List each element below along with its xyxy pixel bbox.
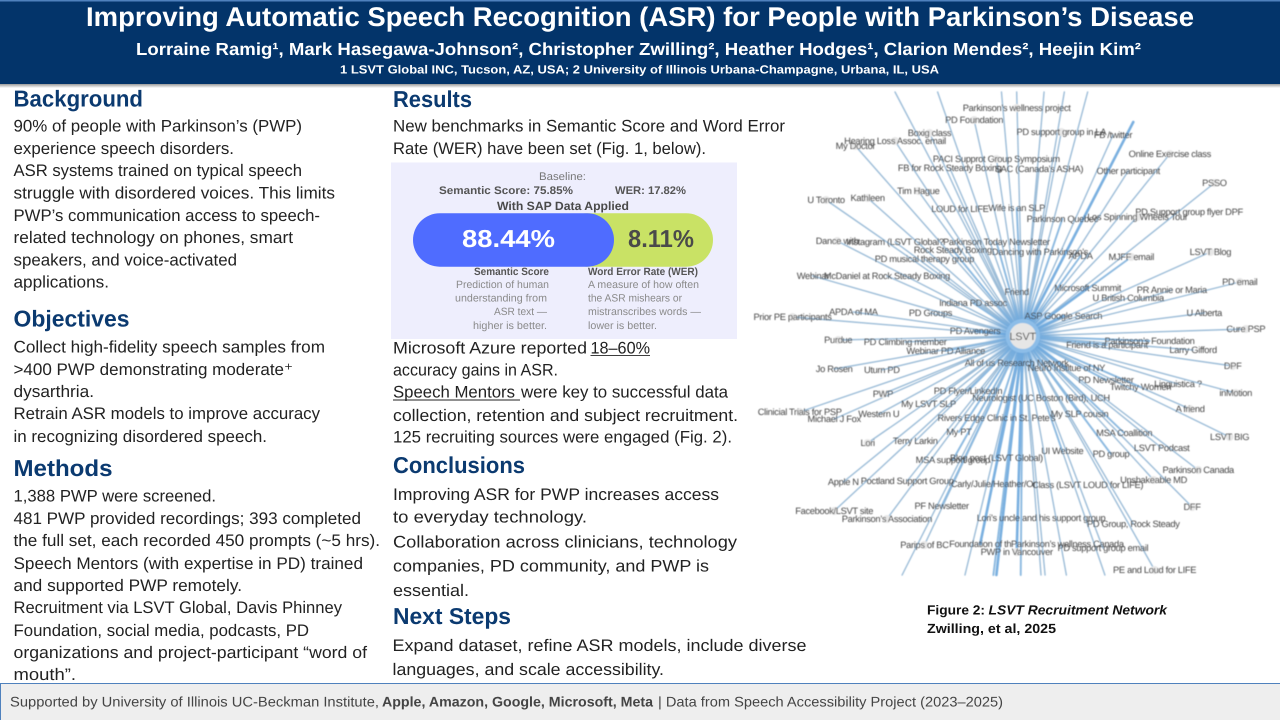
conclusions text: Collaboration across clinicians, technology [393, 533, 738, 552]
title: Improving Automatic Speech Recognition (ASR) for People with Parkinson’s Disease [86, 2, 1194, 32]
semantic score definition [455, 266, 549, 332]
network labels top: ASP Google Search [1024, 311, 1102, 321]
network labels bottom: A friend [1176, 404, 1205, 414]
heading: conclusions: Conclusions [393, 452, 525, 478]
panel: methods [14, 455, 380, 684]
network labels bottom: PD Climbing member [864, 337, 947, 347]
network labels bottom: LSVT Podcast [1134, 443, 1190, 453]
background text: PWP’s communication access to speech- [14, 206, 320, 225]
network labels bottom: Poctland Support Group [861, 476, 954, 486]
semantic score definition: ASR text — [494, 306, 547, 318]
network labels top: U Alberta [1187, 308, 1223, 318]
network labels top: Parkinson Today Newsletter [943, 237, 1050, 247]
network labels bottom: Western U [858, 409, 899, 419]
footer text [10, 694, 1003, 710]
network labels top: MJFF email [1109, 252, 1154, 262]
methods text: Recruitment via LSVT Global, Davis Phinney [14, 598, 343, 617]
objectives text: Collect high-fidelity speech samples from [14, 337, 325, 356]
network labels top: U British Columbia [1093, 293, 1165, 303]
results findings: 125 recruiting sources were engaged (Fig. 2). [393, 428, 732, 447]
conclusions text: Improving ASR for PWP increases access [393, 485, 719, 504]
network labels top: Rock Steady Boxing [914, 245, 992, 255]
next steps text [392, 636, 806, 679]
background text: struggle with disordered voices. This limits [14, 184, 335, 203]
word error rate definition: the ASR mishears or [588, 293, 682, 305]
conclusions text [393, 485, 738, 600]
network labels top: Friend [1004, 287, 1029, 297]
network labels bottom: DFF [1184, 502, 1201, 512]
footer text: | Data from Speech Accessibility Project (2023–2025) [658, 694, 1003, 710]
methods text: Speech Mentors (with expertise in PD) trained [14, 554, 363, 573]
figure 2 caption [927, 602, 1168, 636]
semantic score pill [413, 213, 614, 267]
network labels top: Dance with [816, 236, 859, 246]
network labels bottom: PF Newsletter [915, 501, 969, 511]
baseline scores: Semantic Score: 75.85% [439, 185, 573, 197]
network labels bottom: Uturn PD [864, 365, 900, 375]
methods text: Foundation, social media, podcasts, PD [14, 621, 309, 640]
network labels bottom: Unshakeable MD [1120, 475, 1188, 485]
network labels bottom: inMotion [1219, 388, 1252, 398]
header banner [0, 0, 1280, 88]
background text: related technology on phones, smart [14, 228, 293, 247]
network labels bottom: PD Newsletter [1078, 375, 1134, 385]
network labels top: PD Groups [909, 308, 953, 318]
network labels top: Dancing with Parkinson’s [992, 247, 1089, 257]
network labels bottom: Parips of BC [900, 540, 949, 550]
authors: Lorraine Ramig¹, Mark Hasegawa-Johnson², Christopher Zwilling², Heather Hodges¹, Clarion Mendes², Heejin Kim² [136, 39, 1141, 59]
network labels bottom: PE and Loud for LIFE [1113, 565, 1196, 575]
network labels bottom: Rivers Edge Clinic in St. Pete’s [937, 413, 1056, 423]
network labels top: PD Avengers [950, 326, 1001, 336]
network labels bottom: Lori’s uncle and his support group [977, 513, 1106, 523]
panel: conclusions [393, 452, 738, 600]
network labels bottom: Carly/Julie/Heather/Or [951, 479, 1036, 489]
network labels top: U Toronto [807, 195, 845, 205]
network labels top: Wife is an SLP [988, 203, 1045, 213]
network nodes [789, 104, 1250, 574]
network labels bottom: Apple N [828, 477, 859, 487]
network labels top: Boxig class [908, 128, 952, 138]
network labels bottom: MSA Coallition [1096, 428, 1152, 438]
baseline scores: WER: 17.82% [615, 185, 686, 197]
network labels top: Instagram (LSVT Global? [846, 237, 944, 247]
network labels bottom: PWP [873, 389, 893, 399]
word error rate definition: A measure of how often [588, 279, 699, 291]
network labels bottom: Jo Rosen [816, 364, 853, 374]
panel: objectives [14, 306, 325, 446]
footer bar [0, 684, 1280, 720]
network labels top: Other participant [1097, 166, 1161, 176]
objectives text: dysarthria. [14, 382, 94, 401]
figure 2 caption: LSVT Recruitment Network [988, 602, 1168, 617]
methods text: and supported PWP remotely. [14, 576, 242, 595]
network labels bottom: DPF [1224, 361, 1242, 371]
network labels bottom: PD group [1093, 449, 1130, 459]
network labels bottom: Neurologist (UC Boston (Bird), UCH [972, 393, 1110, 403]
network labels top: McDaniel at Rock Steady Boxing [824, 271, 950, 281]
network labels top: Parkinson Quebec [1027, 214, 1099, 224]
network labels top: PR Annie or Maria [1137, 285, 1208, 295]
network labels top: FB /twitter [1094, 130, 1132, 140]
network labels top: Hearing Loss Assoc. email [844, 136, 946, 146]
network labels bottom: Linguistica ? [1154, 379, 1202, 389]
network labels top: Cure PSP [1226, 324, 1265, 334]
network labels bottom: Webinar PD Alliance [906, 346, 985, 356]
network labels bottom: My PT [946, 427, 972, 437]
network labels bottom: My SLP cousin [1051, 409, 1109, 419]
results findings: were key to successful data [520, 383, 729, 402]
network labels bottom: PD Flyer/LinkedIn [934, 386, 1002, 396]
network labels top: PD email [1222, 277, 1258, 287]
WER pill [560, 213, 713, 267]
network labels bottom: Larry Gifford [1169, 345, 1217, 355]
network labels top: Tim Hague [897, 186, 940, 196]
network labels top: APDA of MA [829, 307, 879, 317]
WER pill: 8.11% [628, 226, 694, 253]
baseline scores [439, 171, 686, 213]
network edges [793, 92, 1246, 575]
results findings: 18–60% [590, 338, 650, 357]
network labels bottom: Clinicial Trials for PSP [758, 407, 842, 417]
network labels bottom: Foundation of th [949, 539, 1011, 549]
results findings: accuracy gains in ASR. [393, 361, 558, 380]
heading: next steps: Next Steps [393, 603, 511, 629]
network labels top: PSSO [1202, 178, 1227, 188]
network labels bottom: Parkinson’s Foundation [1104, 336, 1195, 346]
network labels top: FB for Rock Steady Boxing [898, 163, 1002, 173]
footer text: Apple, Amazon, Google, Microsoft, Meta [382, 694, 653, 710]
baseline scores: Baseline: [539, 171, 586, 183]
network labels top: SAC (Canada’s ASHA) [995, 164, 1083, 174]
panel: next steps [392, 603, 806, 679]
word error rate definition [588, 266, 701, 332]
heading: objectives: Objectives [14, 306, 130, 332]
network labels bottom: LSVT BIG [1210, 432, 1249, 442]
conclusions text: to everyday technology. [393, 508, 587, 527]
heading: background: Background [14, 86, 143, 112]
methods text: 1,388 PWP were screened. [14, 487, 216, 506]
network labels top: LOUD for LIFE [931, 204, 989, 214]
network labels bottom: Blog post (LSVT Global) [950, 453, 1043, 463]
network labels top: PD musical therapy group [875, 254, 974, 264]
network labels top: Microsoft Summit [1054, 283, 1122, 293]
semantic score definition: Prediction of human [456, 279, 549, 291]
network labels bottom: Twitchy Women [1110, 382, 1171, 392]
semantic score definition: understanding from [455, 293, 547, 305]
results findings [393, 338, 738, 447]
baseline scores: With SAP Data Applied [497, 199, 629, 213]
network labels bottom: Michael J Fox [808, 414, 862, 424]
background text: speakers, and voice-activated [14, 251, 237, 270]
word error rate definition: mistranscribes words — [588, 306, 701, 318]
methods text: the full set, each recorded 450 prompts (~5 hrs). [14, 531, 380, 550]
network labels top: Webinar [797, 271, 829, 281]
results intro: New benchmarks in Semantic Score and Word Error [393, 117, 785, 136]
methods text: organizations and project-participant “word of [14, 643, 367, 662]
background text: applications. [14, 273, 109, 292]
objectives text: >400 PWP demonstrating moderate⁺ [14, 360, 293, 379]
methods text: 481 PWP provided recordings; 393 completed [14, 509, 361, 528]
methods text [14, 487, 380, 684]
background text: ASR systems trained on typical speech [14, 161, 302, 180]
network labels top: Kathleen [851, 193, 885, 203]
network labels top: Online Exercise class [1129, 149, 1212, 159]
objectives text [14, 337, 325, 446]
figure 2: LSVT recruitment network [754, 92, 1265, 575]
network labels top: Parkinson’s wellness project [963, 103, 1071, 113]
figure 2 caption: Zwilling, et al, 2025 [927, 621, 1056, 636]
next steps text: languages, and scale accessibility. [392, 660, 664, 679]
network labels top: PD support group in LA [1016, 127, 1107, 137]
heading: results: Results [393, 86, 472, 112]
network labels top [754, 103, 1265, 336]
network labels top: APDA [1069, 251, 1094, 261]
network labels bottom: Purdue [824, 335, 852, 345]
semantic score definition: higher is better. [473, 320, 547, 332]
network labels bottom: PD Group, Rock Steady [1087, 519, 1180, 529]
objectives text: in recognizing disordered speech. [14, 427, 267, 446]
network labels bottom: PD support group email [1058, 543, 1149, 553]
word error rate definition: Word Error Rate (WER) [588, 266, 698, 278]
affiliations: 1 LSVT Global INC, Tucson, AZ, USA; 2 University of Illinois Urbana-Champagne, Urbana, IL, USA [340, 62, 940, 76]
results findings: collection, retention and subject recruitment. [393, 406, 738, 425]
network labels bottom: Parkinson’s Association [842, 514, 932, 524]
objectives text: Retrain ASR models to improve accuracy [14, 404, 321, 423]
word error rate definition: lower is better. [588, 320, 657, 332]
next steps text: Expand dataset, refine ASR models, include diverse [392, 636, 806, 655]
network labels bottom: PWP in Vancouver [981, 547, 1053, 557]
network labels bottom [758, 335, 1252, 575]
network labels top: PACI Supprot Group Symposium [933, 154, 1061, 164]
network labels bottom: MSA support group [916, 455, 990, 465]
network labels top: PD Foundation [945, 115, 1003, 125]
network labels bottom: Class (LSVT LOUD for LIFE) [1032, 480, 1143, 490]
background text [14, 117, 335, 292]
network labels bottom: Friend is a participant [1066, 340, 1149, 350]
network labels top: Prior PE participants [754, 312, 832, 322]
results intro [393, 117, 785, 158]
network labels top: Los Spinning Wheels Tour [1087, 212, 1188, 222]
network labels bottom: Facebook/LSVT site [795, 506, 873, 516]
figure 2 caption: Figure 2: [927, 602, 985, 617]
figure 1: score panel [391, 162, 737, 339]
central node: LSVT [1008, 321, 1038, 351]
network labels bottom: Neuro Institue of NY [1028, 363, 1105, 373]
panel: results [391, 86, 785, 447]
network labels bottom: Terry Larkin [893, 436, 938, 446]
heading: methods: Methods [14, 455, 112, 481]
results findings: Microsoft Azure reported [393, 338, 587, 357]
network labels bottom: My LSVT SLP [901, 399, 956, 409]
semantic score pill: 88.44% [462, 226, 555, 253]
network labels top: Indiana PD assoc [939, 298, 1008, 308]
semantic score definition: Semantic Score [474, 266, 549, 278]
conclusions text: companies, PD community, and PWP is [393, 557, 709, 576]
network labels top: PD Support group flyer DPF [1135, 207, 1244, 217]
network labels bottom: UI Website [1041, 446, 1084, 456]
footer text: Supported by University of Illinois UC-Beckman Institute, [10, 694, 379, 710]
results intro: Rate (WER) have been set (Fig. 1, below). [393, 139, 706, 158]
central node: LSVT: LSVT [1009, 331, 1037, 343]
network labels bottom: Lori [861, 438, 875, 448]
network labels bottom: All of us Research Network [965, 358, 1069, 368]
network labels top: My Doctor [836, 141, 875, 151]
results findings: Speech Mentors [393, 383, 515, 402]
network labels top: LSVT Blog [1190, 247, 1231, 257]
network labels bottom: Parkinson’s wellness Canada [1011, 539, 1125, 549]
background text: experience speech disorders. [14, 139, 234, 158]
background text: 90% of people with Parkinson’s (PWP) [14, 117, 302, 136]
methods text: mouth”. [14, 665, 76, 684]
conclusions text: essential. [393, 581, 469, 600]
network labels bottom: Parkinson Canada [1162, 465, 1235, 475]
panel: background [14, 86, 335, 292]
